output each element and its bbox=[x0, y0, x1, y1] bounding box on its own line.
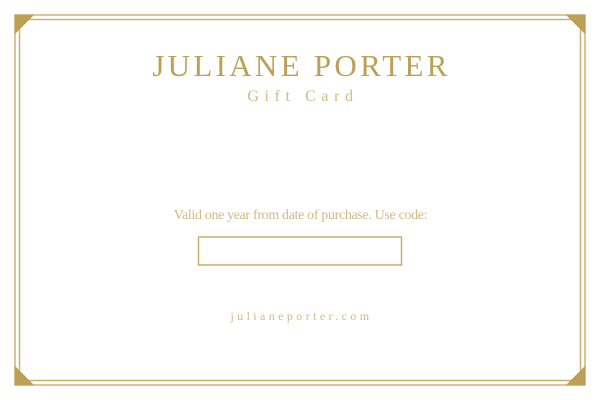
validity text: Valid one year from date of purchase. Use code: bbox=[174, 208, 427, 223]
title: JULIANE PORTER bbox=[152, 48, 451, 83]
code box bbox=[198, 237, 402, 265]
subtitle: Gift Card bbox=[247, 88, 359, 105]
website: julianeporter.com bbox=[230, 309, 373, 323]
